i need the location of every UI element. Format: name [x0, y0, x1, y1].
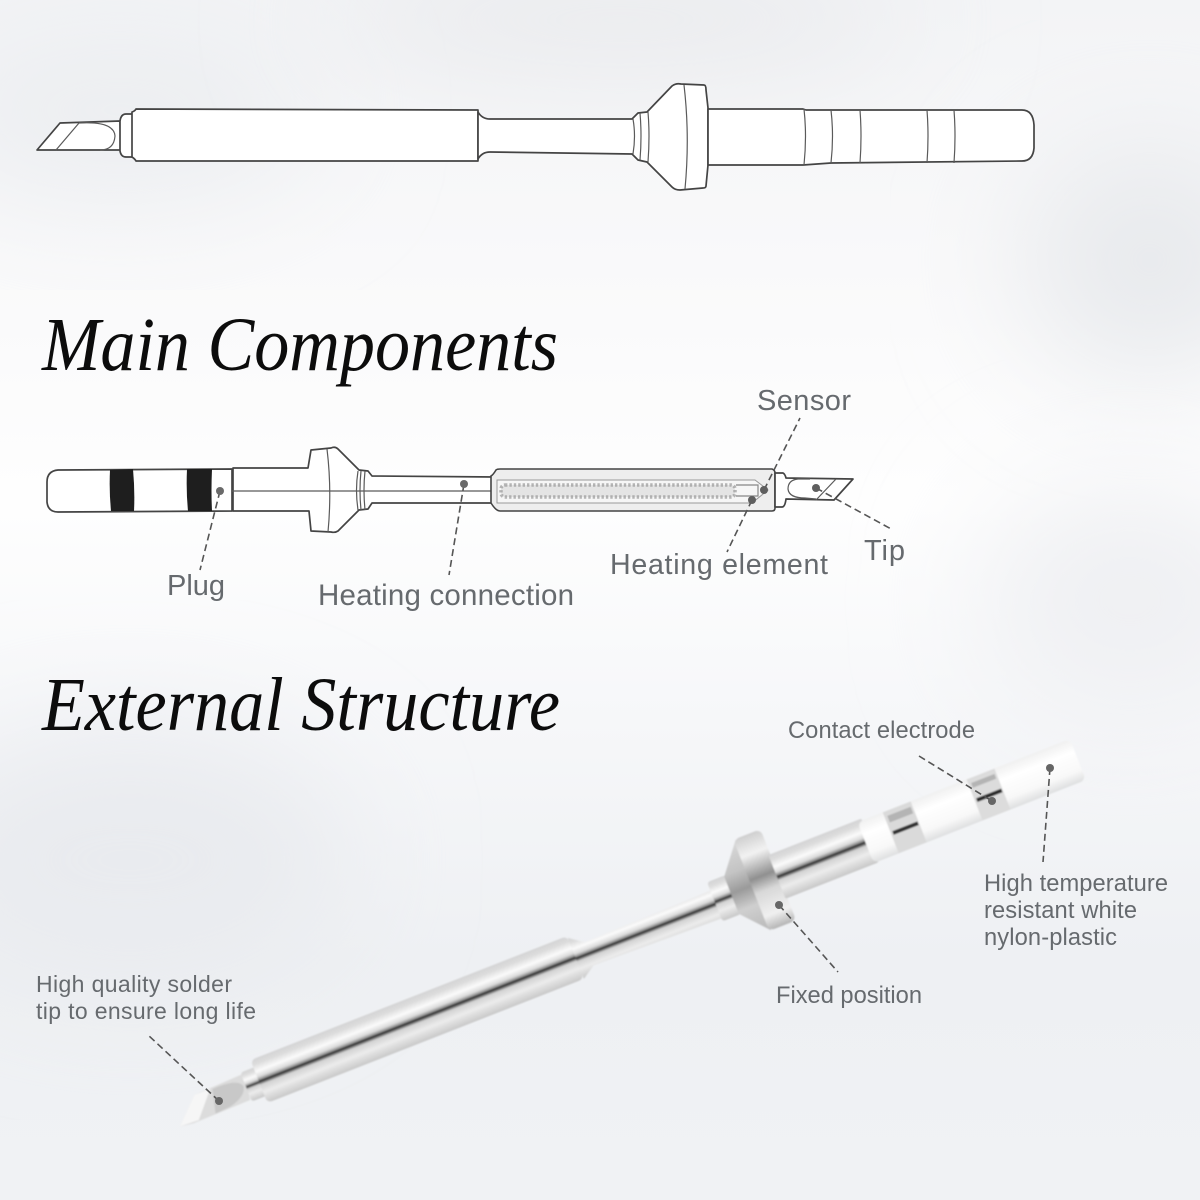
collar	[120, 114, 135, 157]
label: Tip: Tip	[864, 535, 905, 567]
label: High temperature resistant white nylon-plastic: High temperature	[984, 871, 1168, 897]
label: Contact electrode	[788, 718, 996, 805]
soldering tip	[775, 473, 853, 507]
label: Tip	[812, 484, 905, 567]
metal band 2 (contact electrode)	[967, 769, 1010, 820]
photo: soldering tip	[156, 712, 1095, 1157]
white nylon body	[858, 739, 1086, 863]
heading: Main Components: Main Components	[41, 303, 558, 387]
label: High quality solder tip: tip to ensure long life	[36, 998, 256, 1024]
rear metal sleeve	[768, 819, 879, 899]
blade	[170, 1073, 255, 1128]
heating body	[491, 469, 775, 511]
label: Heating connection: Heating connection	[318, 579, 574, 612]
tip collar	[240, 1066, 268, 1102]
heading: External Structure: External Structure	[41, 663, 560, 747]
label: High temperature resistant white nylon-plastic	[984, 764, 1168, 951]
plug	[47, 469, 232, 512]
plug end	[708, 109, 1034, 165]
label: High temperature resistant white nylon-plastic: nylon-plastic	[984, 925, 1117, 951]
label: Heating element: Heating element	[610, 549, 828, 581]
heating coil	[501, 485, 735, 497]
label: High quality solder tip	[36, 971, 256, 1105]
cone	[713, 840, 771, 939]
collar	[707, 875, 741, 921]
label: Heating connection	[318, 480, 574, 612]
label: Sensor	[757, 385, 851, 494]
neck and flange	[478, 84, 708, 190]
label: Sensor: Sensor	[757, 385, 851, 417]
flange disk	[733, 829, 796, 931]
plug black band 2	[187, 469, 212, 511]
tip blade	[37, 121, 121, 150]
label: Fixed position	[775, 901, 922, 1009]
label: High temperature resistant white nylon-plastic: resistant white	[984, 898, 1137, 924]
front shaft and flange	[233, 447, 496, 532]
top tip outline drawing	[37, 84, 1034, 190]
label: Fixed position: Fixed position	[776, 983, 922, 1009]
label: Plug: Plug	[167, 570, 225, 602]
label: Heating element	[610, 496, 828, 581]
cross-section diagram	[47, 447, 853, 532]
label: Contact electrode: Contact electrode	[788, 718, 975, 744]
main shaft	[132, 109, 478, 161]
metal band 1	[883, 801, 927, 853]
plug black band 1	[110, 469, 134, 511]
label: Plug	[167, 487, 225, 602]
label: High quality solder tip: High quality solder	[36, 971, 232, 997]
main shaft	[251, 936, 584, 1103]
neck	[568, 882, 727, 979]
